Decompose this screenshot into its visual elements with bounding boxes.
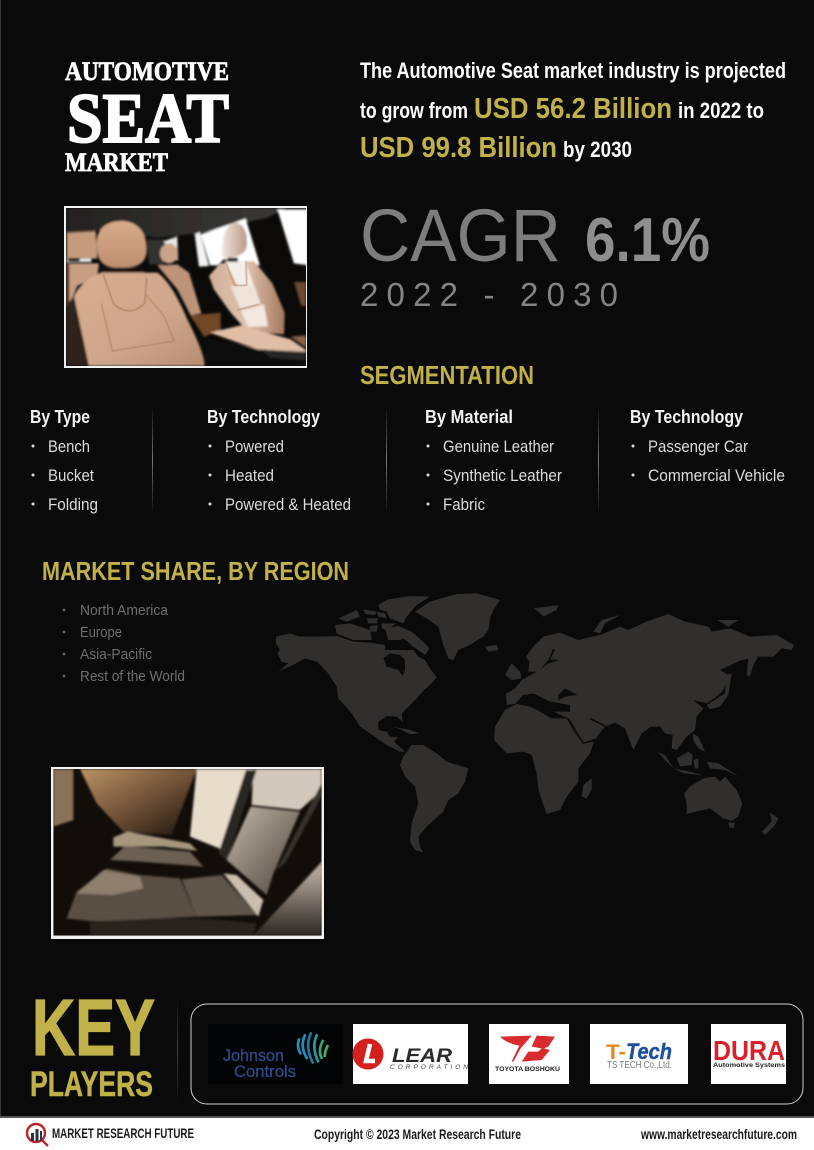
heading: key players: PLAYERS	[30, 1065, 153, 1104]
logo: Market Research Future: MARKET RESEARCH FUTURE	[52, 1125, 194, 1141]
segment: by type: Bench	[48, 437, 90, 456]
photo: car front seats	[64, 206, 309, 368]
segment: by type: By Type	[30, 407, 90, 427]
headline: market projection: to grow from	[360, 98, 468, 123]
segment: by technology: Powered	[225, 437, 284, 456]
logo: Toyota Boshoku: TOYOTA BOSHOKU	[495, 1066, 560, 1073]
logo: TS Tech: T-	[606, 1041, 626, 1064]
heading: key players	[30, 983, 155, 1104]
heading: market share by region: MARKET SHARE, BY REGION	[42, 558, 349, 586]
CAGR callout	[360, 194, 710, 313]
logo: Dura Automotive Systems	[711, 1024, 786, 1084]
headline: market projection	[360, 58, 786, 164]
region list	[63, 602, 185, 685]
segment: by technology: By Technology	[207, 407, 320, 427]
title: MARKET	[65, 148, 168, 177]
segment: by technology	[207, 407, 351, 514]
headline: market projection: in 2022 to	[678, 98, 764, 123]
logo: Lear Corporation: LEAR	[392, 1046, 452, 1067]
segment: by material: Genuine Leather	[443, 437, 554, 456]
segment: by technology: Heated	[225, 466, 274, 485]
segment: by material: Fabric	[443, 495, 485, 514]
logo: Market Research Future	[27, 1124, 194, 1146]
segment: by vehicle technology: By Technology	[630, 407, 743, 427]
logo: Johnson Controls: Johnson	[223, 1046, 284, 1065]
logo: Toyota Boshoku	[489, 1024, 569, 1084]
region list: Asia-Pacific	[80, 646, 152, 663]
headline: market projection: USD 56.2 Billion	[474, 93, 672, 125]
CAGR callout: 6.1%	[585, 206, 710, 275]
copyright: Copyright © 2023 Market Research Future	[314, 1126, 521, 1142]
segment: by vehicle technology: Commercial Vehicle	[648, 466, 785, 485]
logo: Johnson Controls	[208, 1024, 343, 1084]
headline: market projection: by 2030	[563, 137, 632, 162]
segment: by material: Synthetic Leather	[443, 466, 562, 485]
heading: key players: KEY	[32, 983, 155, 1072]
world map	[276, 593, 794, 852]
region list: North America	[80, 602, 169, 619]
region list: Rest of the World	[80, 668, 185, 685]
logo: Johnson Controls: Controls	[234, 1062, 296, 1081]
panel: key player logos	[191, 1004, 803, 1104]
logo: Lear Corporation: CORPORATION	[390, 1064, 468, 1071]
region list: Europe	[80, 624, 122, 641]
title: SEAT	[67, 80, 229, 158]
logo: TS Tech: TS TECH Co.,Ltd.	[607, 1060, 672, 1071]
segment: by type: Bucket	[48, 466, 94, 485]
title	[65, 57, 229, 177]
title: AUTOMOTIVE	[65, 57, 229, 86]
photo: car rear seat	[51, 767, 324, 939]
CAGR callout: CAGR	[360, 194, 561, 277]
headline: market projection: USD 99.8 Billion	[360, 132, 557, 164]
segment: by type	[30, 407, 98, 514]
segment: by vehicle technology: Passenger Car	[648, 437, 748, 456]
logo: Lear Corporation	[352, 1024, 468, 1084]
segment: by vehicle technology	[630, 407, 785, 485]
logo: Dura Automotive Systems: Automotive Systems	[713, 1062, 785, 1069]
footer bar	[0, 1116, 814, 1150]
logo: TS Tech: Tech	[626, 1039, 672, 1064]
logo: Dura Automotive Systems: DURA	[713, 1035, 785, 1066]
heading: segmentation: SEGMENTATION	[360, 362, 534, 390]
segment: by material: By Material	[425, 407, 513, 427]
segment: by type: Folding	[48, 495, 98, 514]
CAGR callout: 2022 - 2030	[360, 276, 618, 313]
segment: by technology: Powered & Heated	[225, 495, 351, 514]
segment: by material	[425, 407, 562, 514]
logo: TS Tech	[590, 1024, 688, 1084]
